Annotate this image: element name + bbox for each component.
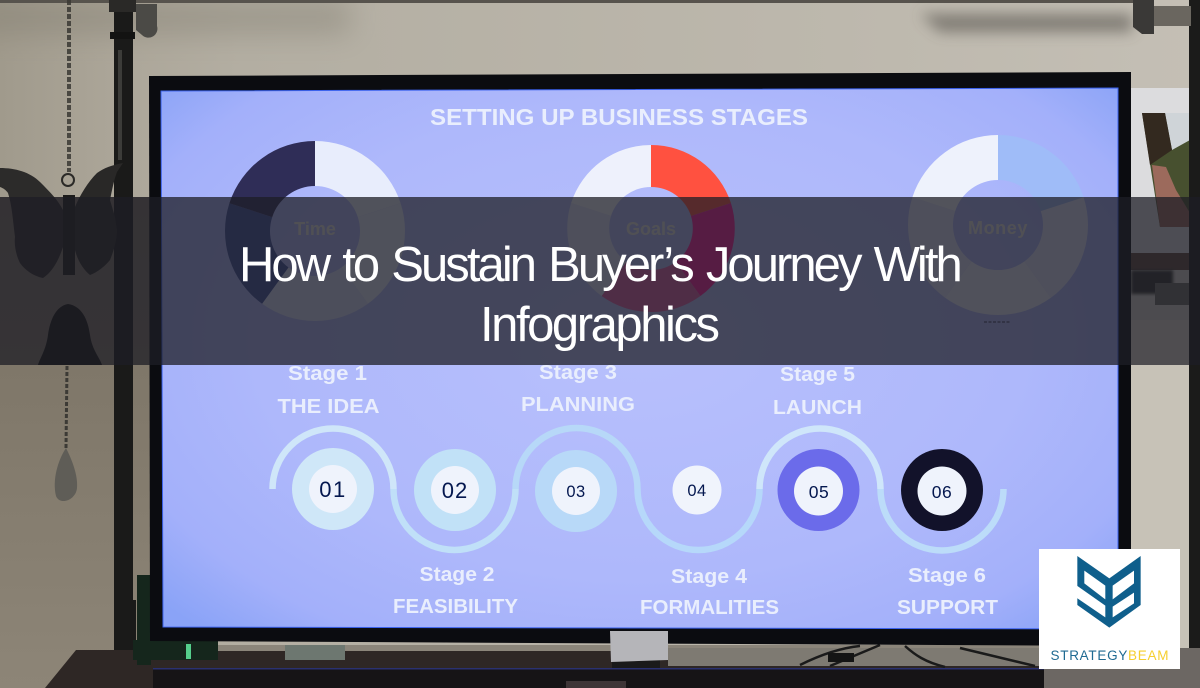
icon: strategybeam chevrons: [1076, 556, 1141, 628]
label: time: Time: [294, 219, 336, 239]
stage 2 label: [393, 563, 518, 618]
stage 2 label: FEASIBILITY: [393, 595, 518, 618]
stage 2 label: Stage 2: [420, 563, 494, 586]
stage 4 label: Stage 4: [671, 565, 748, 588]
stage 4 label: FORMALITIES: [640, 596, 779, 619]
donut chart: time: [225, 141, 405, 321]
stage marker 04: [672, 466, 722, 514]
stage 3 label: PLANNING: [521, 393, 635, 416]
stage marker 03: [535, 450, 617, 532]
stage marker 06: 06: [932, 482, 952, 502]
television bezel: [149, 72, 1131, 646]
main title: [239, 238, 960, 352]
stage 4 label: [640, 565, 779, 619]
stage marker 05: 05: [809, 482, 829, 502]
television stand bracket: [610, 631, 668, 668]
stage marker 02: 02: [442, 478, 468, 503]
stage marker 03: 03: [566, 483, 586, 501]
stage 6 label: SUPPORT: [897, 596, 998, 619]
donut chart: goals: [567, 145, 735, 312]
stage 5 label: Stage 5: [780, 363, 855, 386]
slide heading: SETTING UP BUSINESS STAGES: [430, 104, 808, 130]
stage 5 label: [773, 363, 862, 419]
main title: How to Sustain Buyer’s Journey With: [239, 238, 960, 292]
stage 1 label: THE IDEA: [278, 395, 380, 418]
stage 6 label: [897, 564, 998, 619]
donut chart: money: [908, 135, 1088, 322]
main title: Infographics: [480, 298, 718, 352]
stage marker 02: [414, 449, 496, 531]
metal pipe right: [1133, 0, 1200, 688]
label: goals: Goals: [626, 219, 676, 239]
stage 6 label: Stage 6: [908, 564, 986, 587]
picture frame and shelf at right: [1131, 88, 1193, 688]
television screen: [161, 88, 1118, 629]
caption dashes below money chart: [984, 321, 1011, 323]
logo card: [1039, 549, 1180, 669]
metal pipe left: [109, 0, 157, 688]
stage 3 label: Stage 3: [539, 361, 617, 384]
stage marker 01: 01: [319, 477, 347, 502]
stage path wave: [272, 428, 1004, 550]
stage marker 01: [292, 448, 374, 530]
stage marker 06: [901, 449, 983, 531]
wordmark: STRATEGYBEAM: [1050, 648, 1168, 663]
stage 3 label: [521, 361, 635, 416]
stage 1 label: [278, 362, 380, 418]
table and sound bar: [45, 575, 1200, 688]
stage 5 label: LAUNCH: [773, 396, 862, 419]
stage marker 05: [778, 449, 860, 531]
stage marker 04: 04: [687, 482, 707, 500]
hanging chain, butterfly and bell: [0, 0, 123, 501]
label: money: Money: [968, 218, 1028, 238]
stage 1 label: Stage 1: [288, 362, 367, 385]
dark title band: [0, 197, 1200, 365]
